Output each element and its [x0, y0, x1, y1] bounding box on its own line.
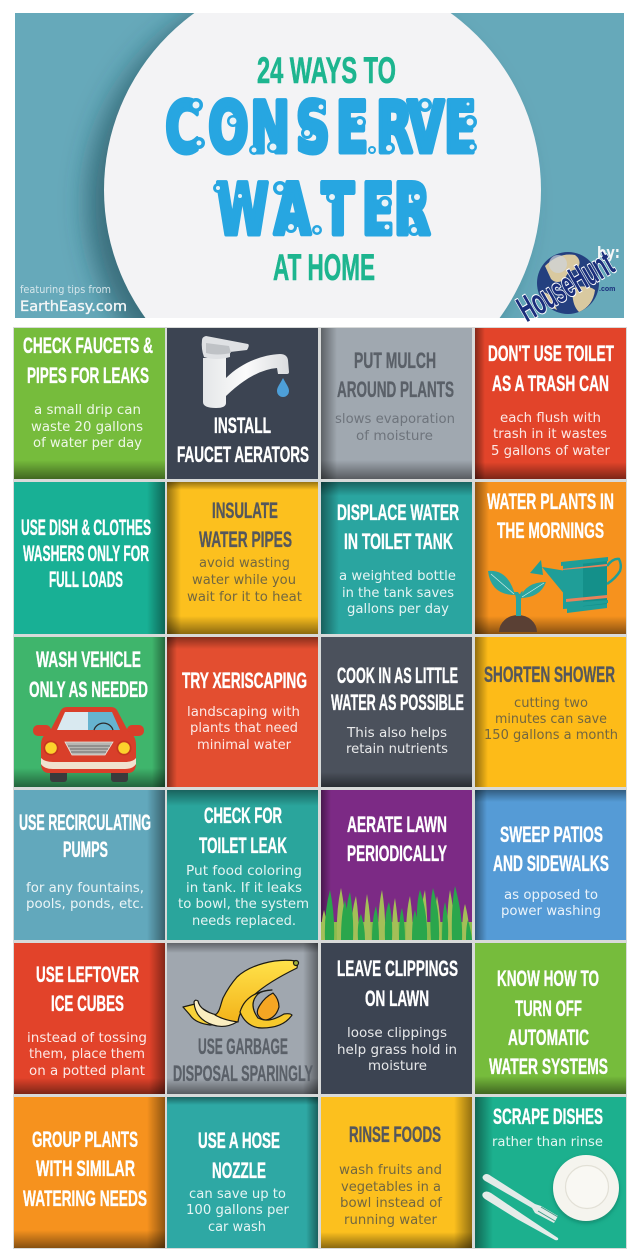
heading: toilet leak: CHECK FOR	[204, 803, 282, 828]
text: weighted bottle: a weighted bottle	[339, 569, 456, 584]
panel: leftover ice cubes	[14, 943, 165, 1094]
heading: cook: WATER AS POSSIBLE	[331, 690, 464, 715]
panel: automatic water systems	[475, 943, 626, 1094]
heading: ice cubes: ICE CUBES	[51, 991, 124, 1016]
text: fountains: pools, ponds, etc.	[26, 897, 144, 912]
heading: aerate lawn	[347, 812, 447, 866]
heading: dish washers	[21, 515, 151, 592]
text: flush: each flush with	[500, 411, 601, 426]
text: nutrients	[346, 726, 448, 757]
heading: insulate pipes: WATER PIPES	[199, 527, 292, 552]
panel: dish washers	[14, 482, 165, 634]
text: small drip	[31, 403, 143, 451]
heading: clippings: LEAVE CLIPPINGS	[337, 956, 458, 981]
text: fountains: for any fountains,	[26, 881, 144, 896]
panel: toilet leak	[167, 790, 318, 940]
text: two minutes	[484, 696, 618, 743]
panel: cook in little water	[321, 637, 472, 787]
heading: recirculating pumps	[19, 810, 151, 862]
text: weighted bottle	[339, 569, 456, 617]
title: water: WATER	[216, 170, 430, 252]
icon: sprout	[488, 571, 546, 632]
text: evaporation	[335, 412, 455, 444]
heading: toilet leak: TOILET LEAK	[199, 833, 287, 858]
text: two minutes: 150 gallons a month	[484, 728, 618, 743]
heading: recirculating pumps: PUMPS	[63, 837, 108, 862]
text: small drip: of water per day	[33, 436, 142, 451]
panel: xeriscaping	[167, 637, 318, 787]
heading: cook	[331, 663, 464, 715]
text: avoid wasting: avoid wasting	[199, 556, 290, 571]
text: landscaping: minimal water	[197, 738, 292, 753]
text: tossing: them, place them	[29, 1047, 145, 1062]
text: avoid wasting	[187, 556, 302, 605]
text: wash fruits: running water	[344, 1213, 438, 1228]
panel: garbage disposal	[167, 943, 318, 1094]
heading: rinse foods: RINSE FOODS	[349, 1122, 441, 1147]
heading: ice cubes	[36, 962, 139, 1016]
text: tossing	[27, 1031, 147, 1079]
panel: scrape dishes	[475, 1097, 626, 1248]
heading: install faucet aerators: FAUCET AERATORS	[177, 442, 309, 467]
title: 24 ways to: 24 WAYS TO	[257, 50, 396, 91]
panel: check faucets	[14, 328, 165, 479]
panel: aerate lawn	[321, 790, 472, 940]
heading: check faucets: PIPES FOR LEAKS	[27, 363, 149, 388]
text: landscaping: landscaping with	[187, 705, 300, 720]
text: food coloring	[178, 864, 309, 929]
logo: HouseHunt globe	[510, 242, 621, 329]
text: power washing: as opposed to	[504, 888, 598, 903]
text: food coloring: to bowl, the system	[178, 897, 309, 912]
panel: rinse foods	[321, 1097, 472, 1248]
heading: group plants	[23, 1127, 147, 1211]
heading: insulate pipes: INSULATE	[212, 498, 278, 523]
heading: install faucet aerators	[177, 413, 309, 467]
text: flush: 5 gallons of water	[491, 444, 611, 459]
header panel	[15, 13, 624, 322]
panel: put mulch	[321, 328, 472, 479]
text: wash fruits	[339, 1163, 442, 1228]
text: food coloring: in tank. If it leaks	[186, 881, 302, 896]
panel: insulate pipes	[167, 482, 318, 634]
heading: cook: COOK IN AS LITTLE	[337, 663, 458, 688]
heading: water plants	[487, 489, 614, 543]
icon: watering can	[530, 557, 621, 613]
heading: dish washers: WASHERS ONLY FOR	[23, 541, 149, 566]
icon: plate	[553, 1155, 619, 1223]
heading: insulate pipes	[199, 498, 292, 552]
panel: install faucet aerators	[167, 328, 318, 479]
heading: clippings	[337, 956, 458, 1011]
heading: automatic water systems: AUTOMATIC	[508, 1025, 589, 1050]
text: 100 gallons: 100 gallons per	[186, 1203, 290, 1218]
credit: featuring tips from: featuring tips from	[20, 284, 111, 296]
heading: wash vehicle: ONLY AS NEEDED	[29, 677, 148, 702]
text: evaporation: of moisture	[356, 429, 433, 444]
heading: check faucets: CHECK FAUCETS &	[23, 333, 153, 358]
heading: toilet trash can	[488, 341, 614, 396]
logo: HouseHunt globe: .com	[599, 286, 615, 293]
text: two minutes: cutting two	[514, 696, 588, 711]
panel: displace water	[321, 482, 472, 634]
icon: knife	[482, 1192, 558, 1240]
text: tossing: on a potted plant	[29, 1064, 145, 1079]
text: 100 gallons	[186, 1187, 290, 1235]
text: moisture: loose clippings	[347, 1026, 447, 1041]
text: two minutes: minutes can save	[495, 712, 607, 727]
heading: aerate lawn: AERATE LAWN	[347, 812, 447, 837]
credit: by: by:	[597, 243, 620, 262]
heading: garbage disposal	[173, 1034, 313, 1086]
icon: faucet	[202, 336, 289, 408]
tile grid background	[13, 327, 627, 1249]
text: moisture: moisture	[368, 1059, 427, 1074]
heading: xeriscaping: TRY XERISCAPING	[182, 668, 307, 693]
heading: displace water	[337, 500, 459, 554]
text: tossing: instead of tossing	[27, 1031, 147, 1046]
text: rather than rinse: rather than rinse	[492, 1135, 603, 1150]
heading: dish washers: FULL LOADS	[49, 567, 123, 592]
panel: sweep patios	[475, 790, 626, 940]
heading: automatic water systems: TURN OFF	[515, 996, 582, 1021]
heading: garbage disposal: USE GARBAGE	[198, 1034, 288, 1059]
heading: aerate lawn: PERIODICALLY	[347, 841, 447, 866]
heading: wash vehicle: WASH VEHICLE	[36, 647, 141, 672]
text: food coloring: Put food coloring	[186, 864, 302, 879]
panel: shorten shower	[475, 637, 626, 787]
text: moisture	[337, 1026, 457, 1074]
panel: recirculating pumps	[14, 790, 165, 940]
text: power washing	[501, 888, 601, 919]
heading: ice cubes: USE LEFTOVER	[36, 962, 139, 987]
text: food coloring: needs replaced.	[192, 914, 296, 929]
icon: banana peel	[183, 960, 298, 1028]
text: small drip: waste 20 gallons	[31, 420, 143, 435]
text: weighted bottle: in the tank saves	[342, 586, 454, 601]
panel: water plants	[475, 482, 626, 634]
heading: hose nozzle: NOZZLE	[212, 1158, 266, 1183]
heading: sweep patios	[493, 822, 609, 876]
credit: EarthEasy.com: EarthEasy.com	[20, 299, 127, 315]
panel: group plants	[14, 1097, 165, 1248]
text: nutrients: This also helps	[346, 726, 447, 741]
heading: wash vehicle	[29, 647, 148, 702]
icon: water drop	[277, 378, 289, 397]
heading: displace water: IN TOILET TANK	[344, 529, 453, 554]
text: power washing: power washing	[501, 904, 601, 919]
text: weighted bottle: gallons per day	[347, 602, 449, 617]
text: wash fruits: bowl instead of	[340, 1196, 442, 1211]
heading: clippings: ON LAWN	[365, 986, 429, 1011]
text: flush: trash in it wastes	[493, 427, 607, 442]
heading: automatic water systems	[489, 966, 608, 1079]
text: 100 gallons: can save up to	[189, 1187, 286, 1202]
heading: group plants: WITH SIMILAR	[36, 1156, 135, 1181]
text: flush	[491, 411, 611, 459]
title: at home: AT HOME	[273, 247, 375, 288]
text: small drip: a small drip can	[34, 403, 141, 418]
panel: leave clippings	[321, 943, 472, 1094]
text: avoid wasting: wait for it to heat	[187, 590, 302, 605]
icon: fork	[482, 1174, 558, 1223]
heading: toilet leak	[199, 803, 287, 858]
text: fountains	[26, 881, 144, 912]
heading: hose nozzle: USE A HOSE	[198, 1128, 280, 1153]
icon: grass	[321, 886, 472, 940]
heading: check faucets	[23, 333, 153, 388]
heading: dish washers: USE DISH & CLOTHES	[21, 515, 151, 540]
heading: install faucet aerators: INSTALL	[214, 413, 271, 438]
text: landscaping	[187, 705, 300, 753]
text: wash fruits: vegetables in a	[341, 1180, 441, 1195]
heading: put mulch	[337, 348, 454, 402]
text: wash fruits: wash fruits and	[339, 1163, 442, 1178]
text: avoid wasting: water while you	[192, 573, 296, 588]
icon: car	[33, 707, 144, 782]
panel: hose nozzle	[167, 1097, 318, 1248]
text: evaporation: slows evaporation	[335, 412, 455, 427]
panel: toilet trash can	[475, 328, 626, 479]
heading: group plants: WATERING NEEDS	[23, 1186, 147, 1211]
heading: put mulch: AROUND PLANTS	[337, 377, 454, 402]
panel: wash vehicle	[14, 637, 165, 787]
heading: hose nozzle	[198, 1128, 280, 1183]
text: moisture: help grass hold in	[337, 1043, 457, 1058]
heading: displace water: DISPLACE WATER	[337, 500, 459, 525]
title: conserve: CONSERVE	[165, 88, 477, 170]
text: landscaping: plants that need	[190, 721, 298, 736]
heading: put mulch: PUT MULCH	[354, 348, 436, 373]
text: 100 gallons: car wash	[208, 1220, 266, 1235]
heading: group plants: GROUP PLANTS	[32, 1127, 138, 1152]
heading: recirculating pumps: USE RECIRCULATING	[19, 810, 151, 835]
text: nutrients: retain nutrients	[346, 742, 448, 757]
heading: garbage disposal: DISPOSAL SPARINGLY	[173, 1061, 313, 1086]
